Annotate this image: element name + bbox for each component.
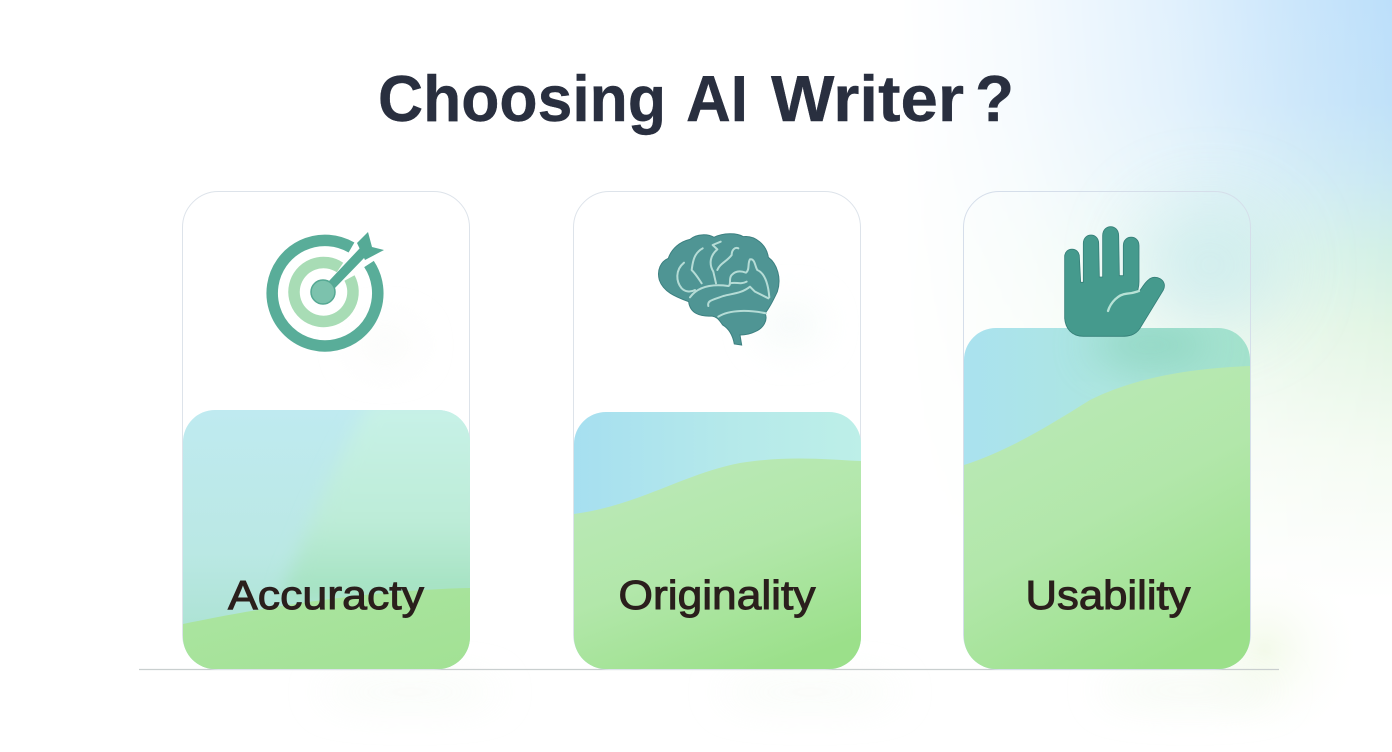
panel: originality xyxy=(574,192,861,670)
title: Choosing xyxy=(378,62,666,135)
title xyxy=(378,62,1014,135)
icon: brain xyxy=(659,234,779,345)
level fill: originality xyxy=(574,412,861,669)
level fill: usability xyxy=(964,323,1250,669)
level fill: accuracy xyxy=(183,400,490,669)
panel: accuracy xyxy=(182,192,490,670)
panel: usability xyxy=(964,192,1250,670)
card outline: accuracy xyxy=(182,192,470,670)
background xyxy=(1004,0,1392,704)
baseline rule xyxy=(139,668,1279,670)
label: originality: Originality xyxy=(618,572,816,618)
title: AI xyxy=(686,62,748,135)
label: usability: Usability xyxy=(1026,572,1191,618)
card outline: originality xyxy=(574,192,860,670)
title: Writer xyxy=(771,62,964,135)
card outline: usability xyxy=(964,192,1250,670)
title: ? xyxy=(975,62,1014,135)
icon: target with arrow xyxy=(272,232,384,346)
label: accuracy: Accuracty xyxy=(228,572,425,618)
icon: hand xyxy=(1065,227,1164,336)
